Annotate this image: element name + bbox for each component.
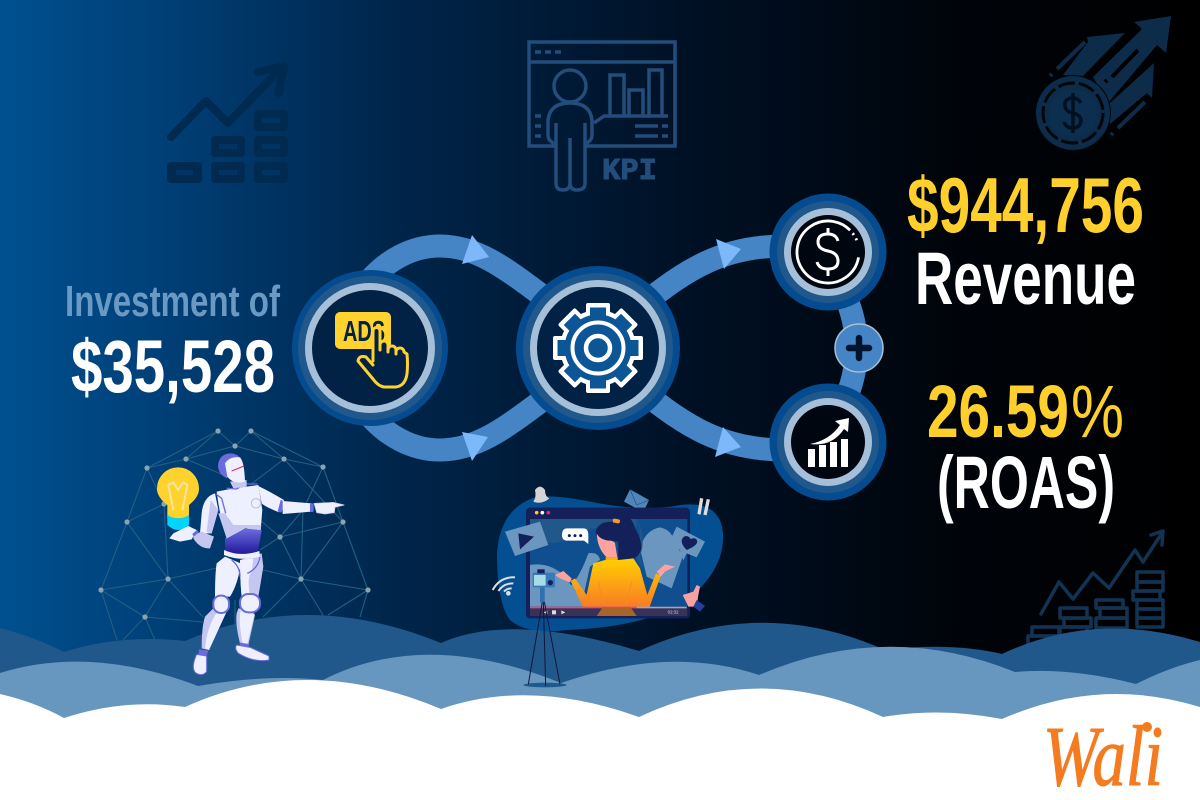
player controls	[530, 607, 687, 616]
cloud: back layer	[0, 615, 1200, 800]
node: gear	[516, 266, 680, 430]
icon: envelope	[624, 489, 649, 512]
robot body	[169, 453, 344, 675]
video window	[526, 508, 690, 618]
icon: play card	[505, 522, 548, 556]
node: roas	[770, 384, 886, 500]
text: investment value: $35,528	[71, 325, 275, 408]
speech bubble	[562, 528, 588, 544]
icon: thumbs up	[683, 585, 705, 612]
KPI label: KPI	[602, 154, 657, 189]
cloud: middle layer	[0, 647, 1200, 800]
ads label: ADS	[343, 316, 385, 348]
arrowheads on flow	[462, 235, 741, 461]
icon: heart card	[668, 527, 705, 561]
text: investment label: Investment of	[65, 277, 280, 326]
icon: light bulb	[157, 467, 199, 530]
icon: growth chart with blocks	[167, 66, 288, 183]
cloud: white foreground	[0, 680, 1200, 800]
icon: pointing hand	[358, 328, 408, 387]
icon: bell	[533, 487, 549, 503]
blue blob behind video scene	[497, 496, 723, 631]
node: ads	[292, 270, 448, 426]
icon: pause bars	[699, 498, 708, 515]
illustration: robot with light bulb	[157, 453, 344, 675]
layered clouds	[0, 615, 1200, 800]
presenter woman	[555, 515, 675, 608]
text: roas value: 26.59	[927, 370, 1069, 453]
icon: bar chart with arrow	[808, 418, 849, 467]
text: roas label: (ROAS)	[937, 441, 1115, 524]
text: roas value: %	[1071, 370, 1124, 453]
node: revenue	[770, 194, 886, 310]
network dome behind robot	[98, 428, 371, 640]
tripod and camera	[523, 569, 567, 687]
plus badge	[835, 324, 883, 372]
illustration: video presenter scene	[493, 487, 708, 687]
icon: wifi	[493, 577, 515, 595]
icon: ads button	[335, 312, 391, 349]
infinity flow connectors	[362, 246, 856, 450]
icon: dollar coin with rising arrows	[1035, 16, 1171, 151]
icon: dollar coin	[792, 216, 864, 288]
icon: KPI presenter board	[529, 42, 675, 190]
icon: gear	[553, 303, 643, 393]
icon: rising chart with coin stacks	[1028, 531, 1163, 645]
timestamp: 02:32	[668, 610, 679, 615]
